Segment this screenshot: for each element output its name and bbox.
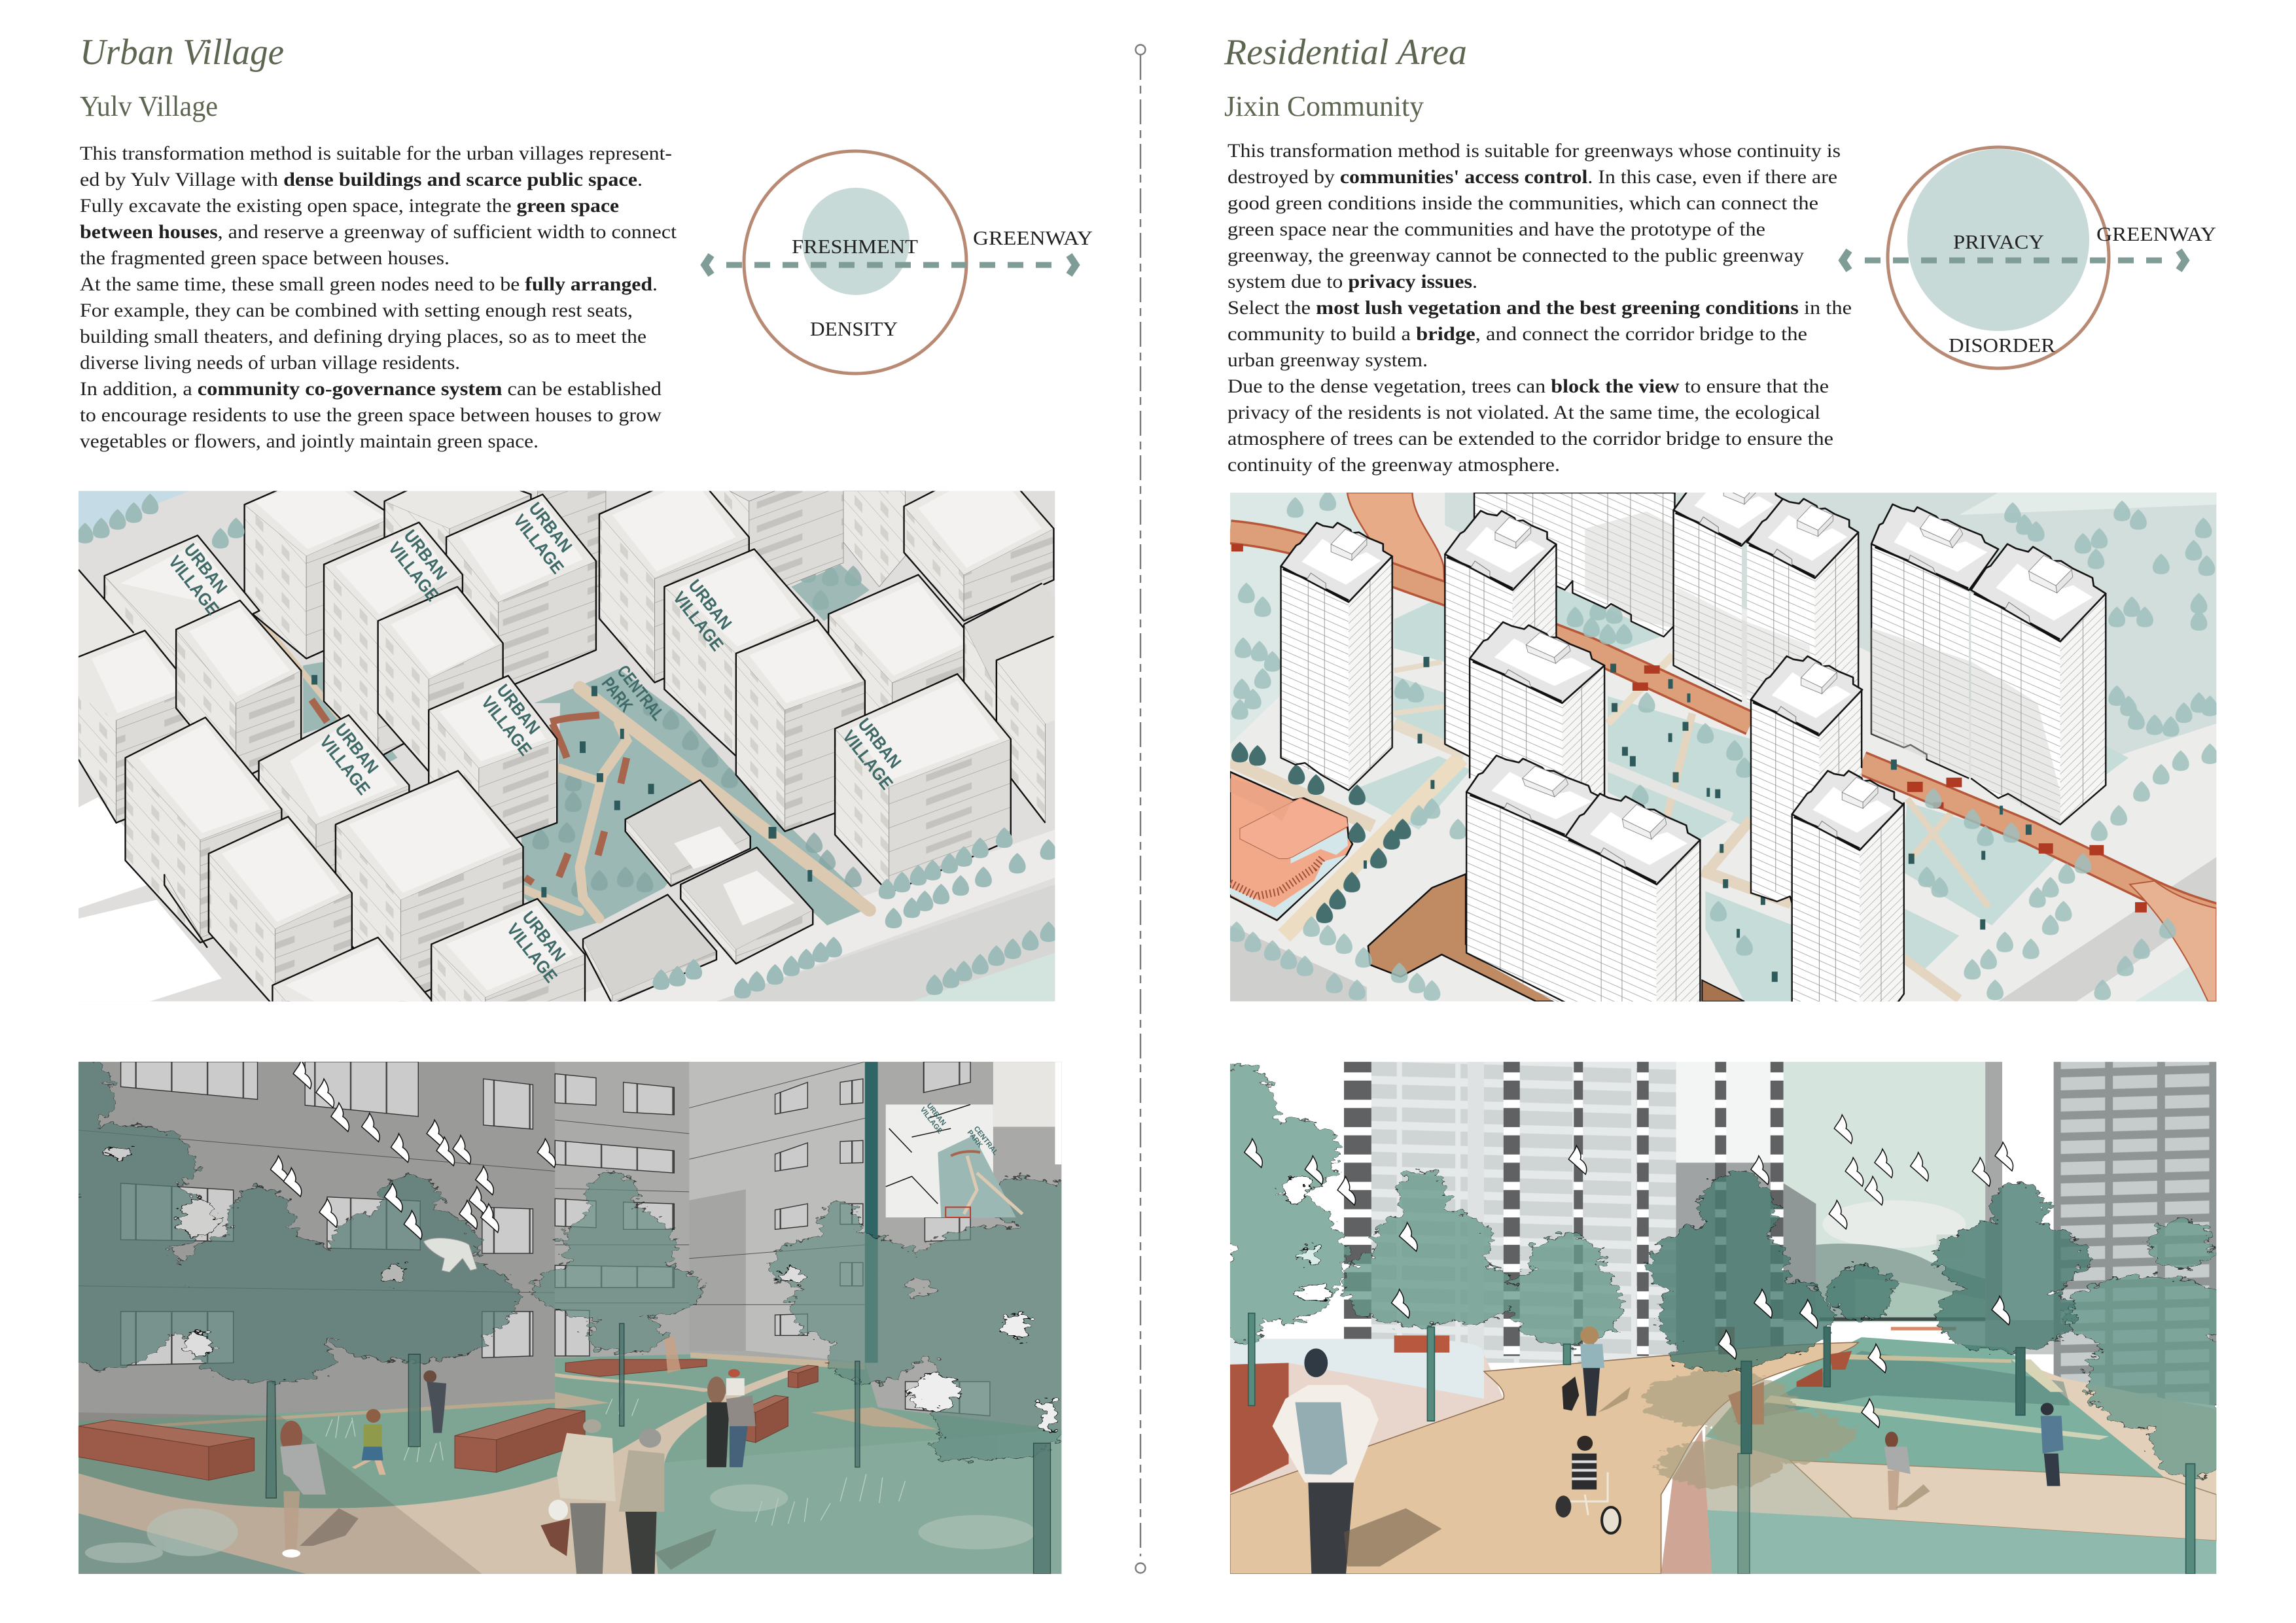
buildings bbox=[79, 460, 1107, 1100]
building labels: URBAN bbox=[518, 907, 569, 965]
right body text: urban greenway system. bbox=[1227, 349, 1428, 371]
terracotta wall and glass railing bbox=[1230, 1335, 1504, 1495]
flying birds bbox=[270, 1060, 556, 1240]
panel: urban village aerial view bbox=[79, 491, 1055, 1002]
left body text: between houses , and reserve a greenway of sufficient width to connect bbox=[80, 221, 677, 243]
people bbox=[1364, 657, 2032, 982]
building labels: VILLAGE bbox=[385, 538, 443, 605]
right body text: Select the most lush vegetation and the best greening conditions in the bbox=[1227, 297, 1852, 319]
left body text: Fully excavate the existing open space, integrate the green space bbox=[80, 195, 619, 217]
people in the park bbox=[311, 675, 812, 898]
brick benches bbox=[79, 1359, 818, 1480]
diagram: privacy and disorder: GREENWAY bbox=[2096, 222, 2216, 245]
benches bbox=[311, 699, 627, 882]
flying birds bbox=[1245, 1115, 2013, 1427]
left body text: diverse living needs of urban village residents. bbox=[80, 352, 460, 374]
panel: residential greenway scene bbox=[1204, 1062, 2236, 1574]
pedestrians bbox=[1273, 1327, 2064, 1574]
figures bbox=[280, 1337, 756, 1574]
white dog bbox=[423, 1238, 477, 1272]
landscape trees bbox=[1228, 490, 2218, 1001]
residential towers bbox=[1281, 466, 2113, 1007]
lawns bbox=[1347, 587, 2128, 1002]
left title: Urban Village bbox=[80, 32, 284, 73]
plaza ground bbox=[1699, 1337, 2216, 1574]
bridge bbox=[1230, 493, 2216, 1002]
central park bbox=[264, 562, 873, 932]
diagram: privacy and disorder bbox=[1843, 147, 2216, 368]
left subtitle: Yulv Village bbox=[80, 90, 218, 122]
right body text: Due to the dense vegetation, trees can block the view to ensure that the bbox=[1227, 375, 1829, 397]
left body text: ed by Yulv Village with dense buildings and scarce public space . bbox=[80, 169, 643, 190]
building labels: VILLAGE bbox=[839, 727, 897, 794]
brown podium building bbox=[1368, 874, 1744, 1002]
right body text: green space near the communities and have the prototype of the bbox=[1227, 218, 1765, 240]
building labels: VILLAGE bbox=[165, 552, 223, 619]
diagram: freshment and density: DENSITY bbox=[810, 317, 898, 340]
building walls bbox=[79, 1062, 1061, 1438]
building labels: URBAN bbox=[493, 680, 544, 738]
right body text: privacy of the residents is not violated. At the same time, the ecological bbox=[1227, 402, 1820, 423]
inset map labels: PARK bbox=[966, 1128, 984, 1149]
right body text bbox=[1227, 140, 1852, 476]
right buildings bbox=[1819, 1062, 2216, 1406]
tree canopies bbox=[23, 1056, 1114, 1574]
panel: residential aerial view bbox=[1228, 466, 2218, 1007]
inset map labels: VILLAGE bbox=[919, 1106, 944, 1135]
building labels: VILLAGE bbox=[503, 920, 561, 986]
right body text: continuity of the greenway atmosphere. bbox=[1227, 454, 1560, 476]
right body text: atmosphere of trees can be extended to the corridor bridge to ensure the bbox=[1227, 428, 1833, 449]
background towers bbox=[1344, 1062, 1784, 1363]
right body text: destroyed by communities' access control . In this case, even if there are bbox=[1227, 166, 1837, 188]
left body text: In addition, a community co-governance system can be established bbox=[80, 378, 662, 400]
building labels: PARK bbox=[598, 674, 637, 716]
building labels: VILLAGE bbox=[510, 511, 568, 578]
building labels: CENTRAL bbox=[613, 661, 668, 724]
lawn bbox=[79, 1354, 1061, 1574]
floor lines bbox=[79, 1062, 865, 1304]
left body text: This transformation method is suitable for the urban villages represent- bbox=[80, 143, 672, 164]
inset map labels: URBAN bbox=[925, 1102, 947, 1127]
sky and hills bbox=[1784, 1062, 1985, 1322]
building labels: URBAN bbox=[525, 498, 576, 556]
tree canopies bbox=[1204, 1064, 2236, 1574]
right subtitle: Jixin Community bbox=[1224, 90, 1424, 122]
dark trees bbox=[1231, 742, 1411, 923]
diagram: freshment and density bbox=[705, 151, 1093, 374]
inset map labels: CENTRAL bbox=[972, 1125, 1000, 1157]
building labels: URBAN bbox=[331, 720, 382, 777]
walking paths bbox=[79, 1353, 938, 1574]
diagram: privacy and disorder: DISORDER bbox=[1949, 334, 2055, 357]
diagram: privacy and disorder: PRIVACY bbox=[1953, 230, 2044, 253]
diagram: freshment and density: GREENWAY bbox=[973, 226, 1093, 249]
center divider bbox=[1136, 44, 1145, 1573]
building labels: URBAN bbox=[684, 576, 735, 633]
right body text: system due to privacy issues . bbox=[1227, 271, 1477, 292]
building labels: URBAN bbox=[180, 540, 231, 597]
grass tufts bbox=[326, 1395, 906, 1526]
right body text: greenway, the greenway cannot be connected to the public greenway bbox=[1227, 245, 1804, 266]
left body text: For example, they can be combined with setting enough rest seats, bbox=[80, 300, 633, 321]
building labels: VILLAGE bbox=[669, 588, 728, 655]
inset location map bbox=[886, 1104, 1023, 1217]
building labels: URBAN bbox=[854, 714, 905, 772]
left body text: vegetables or flowers, and jointly maintain green space. bbox=[80, 430, 539, 452]
right body text: good green conditions inside the communities, which can connect the bbox=[1227, 192, 1818, 214]
building labels: URBAN bbox=[400, 526, 451, 584]
orange podium building bbox=[1230, 772, 1352, 920]
left body text: to encourage residents to use the green space between houses to grow bbox=[80, 404, 662, 426]
right body text: This transformation method is suitable for greenways whose continuity is bbox=[1227, 140, 1841, 162]
diagram: freshment and density: FRESHMENT bbox=[792, 235, 918, 258]
windows bbox=[121, 1062, 990, 1416]
left body text: the fragmented green space between houses. bbox=[80, 247, 450, 269]
left body text: building small theaters, and defining drying places, so as to meet the bbox=[80, 326, 646, 347]
right title: Residential Area bbox=[1224, 32, 1467, 73]
main timber deck bbox=[1230, 1327, 1858, 1574]
paths bbox=[1230, 655, 1988, 999]
panel: urban village courtyard scene bbox=[23, 1056, 1114, 1574]
left body text: At the same time, these small green nodes need to be fully arranged . bbox=[80, 273, 658, 295]
street trees bbox=[77, 494, 1057, 998]
inset map labels bbox=[919, 1102, 1000, 1157]
building labels bbox=[165, 498, 912, 986]
right body text: community to build a bridge, and connect the corridor bridge to the bbox=[1227, 323, 1807, 345]
left body text bbox=[80, 143, 677, 452]
building labels: VILLAGE bbox=[478, 693, 536, 759]
building labels: VILLAGE bbox=[316, 732, 374, 799]
